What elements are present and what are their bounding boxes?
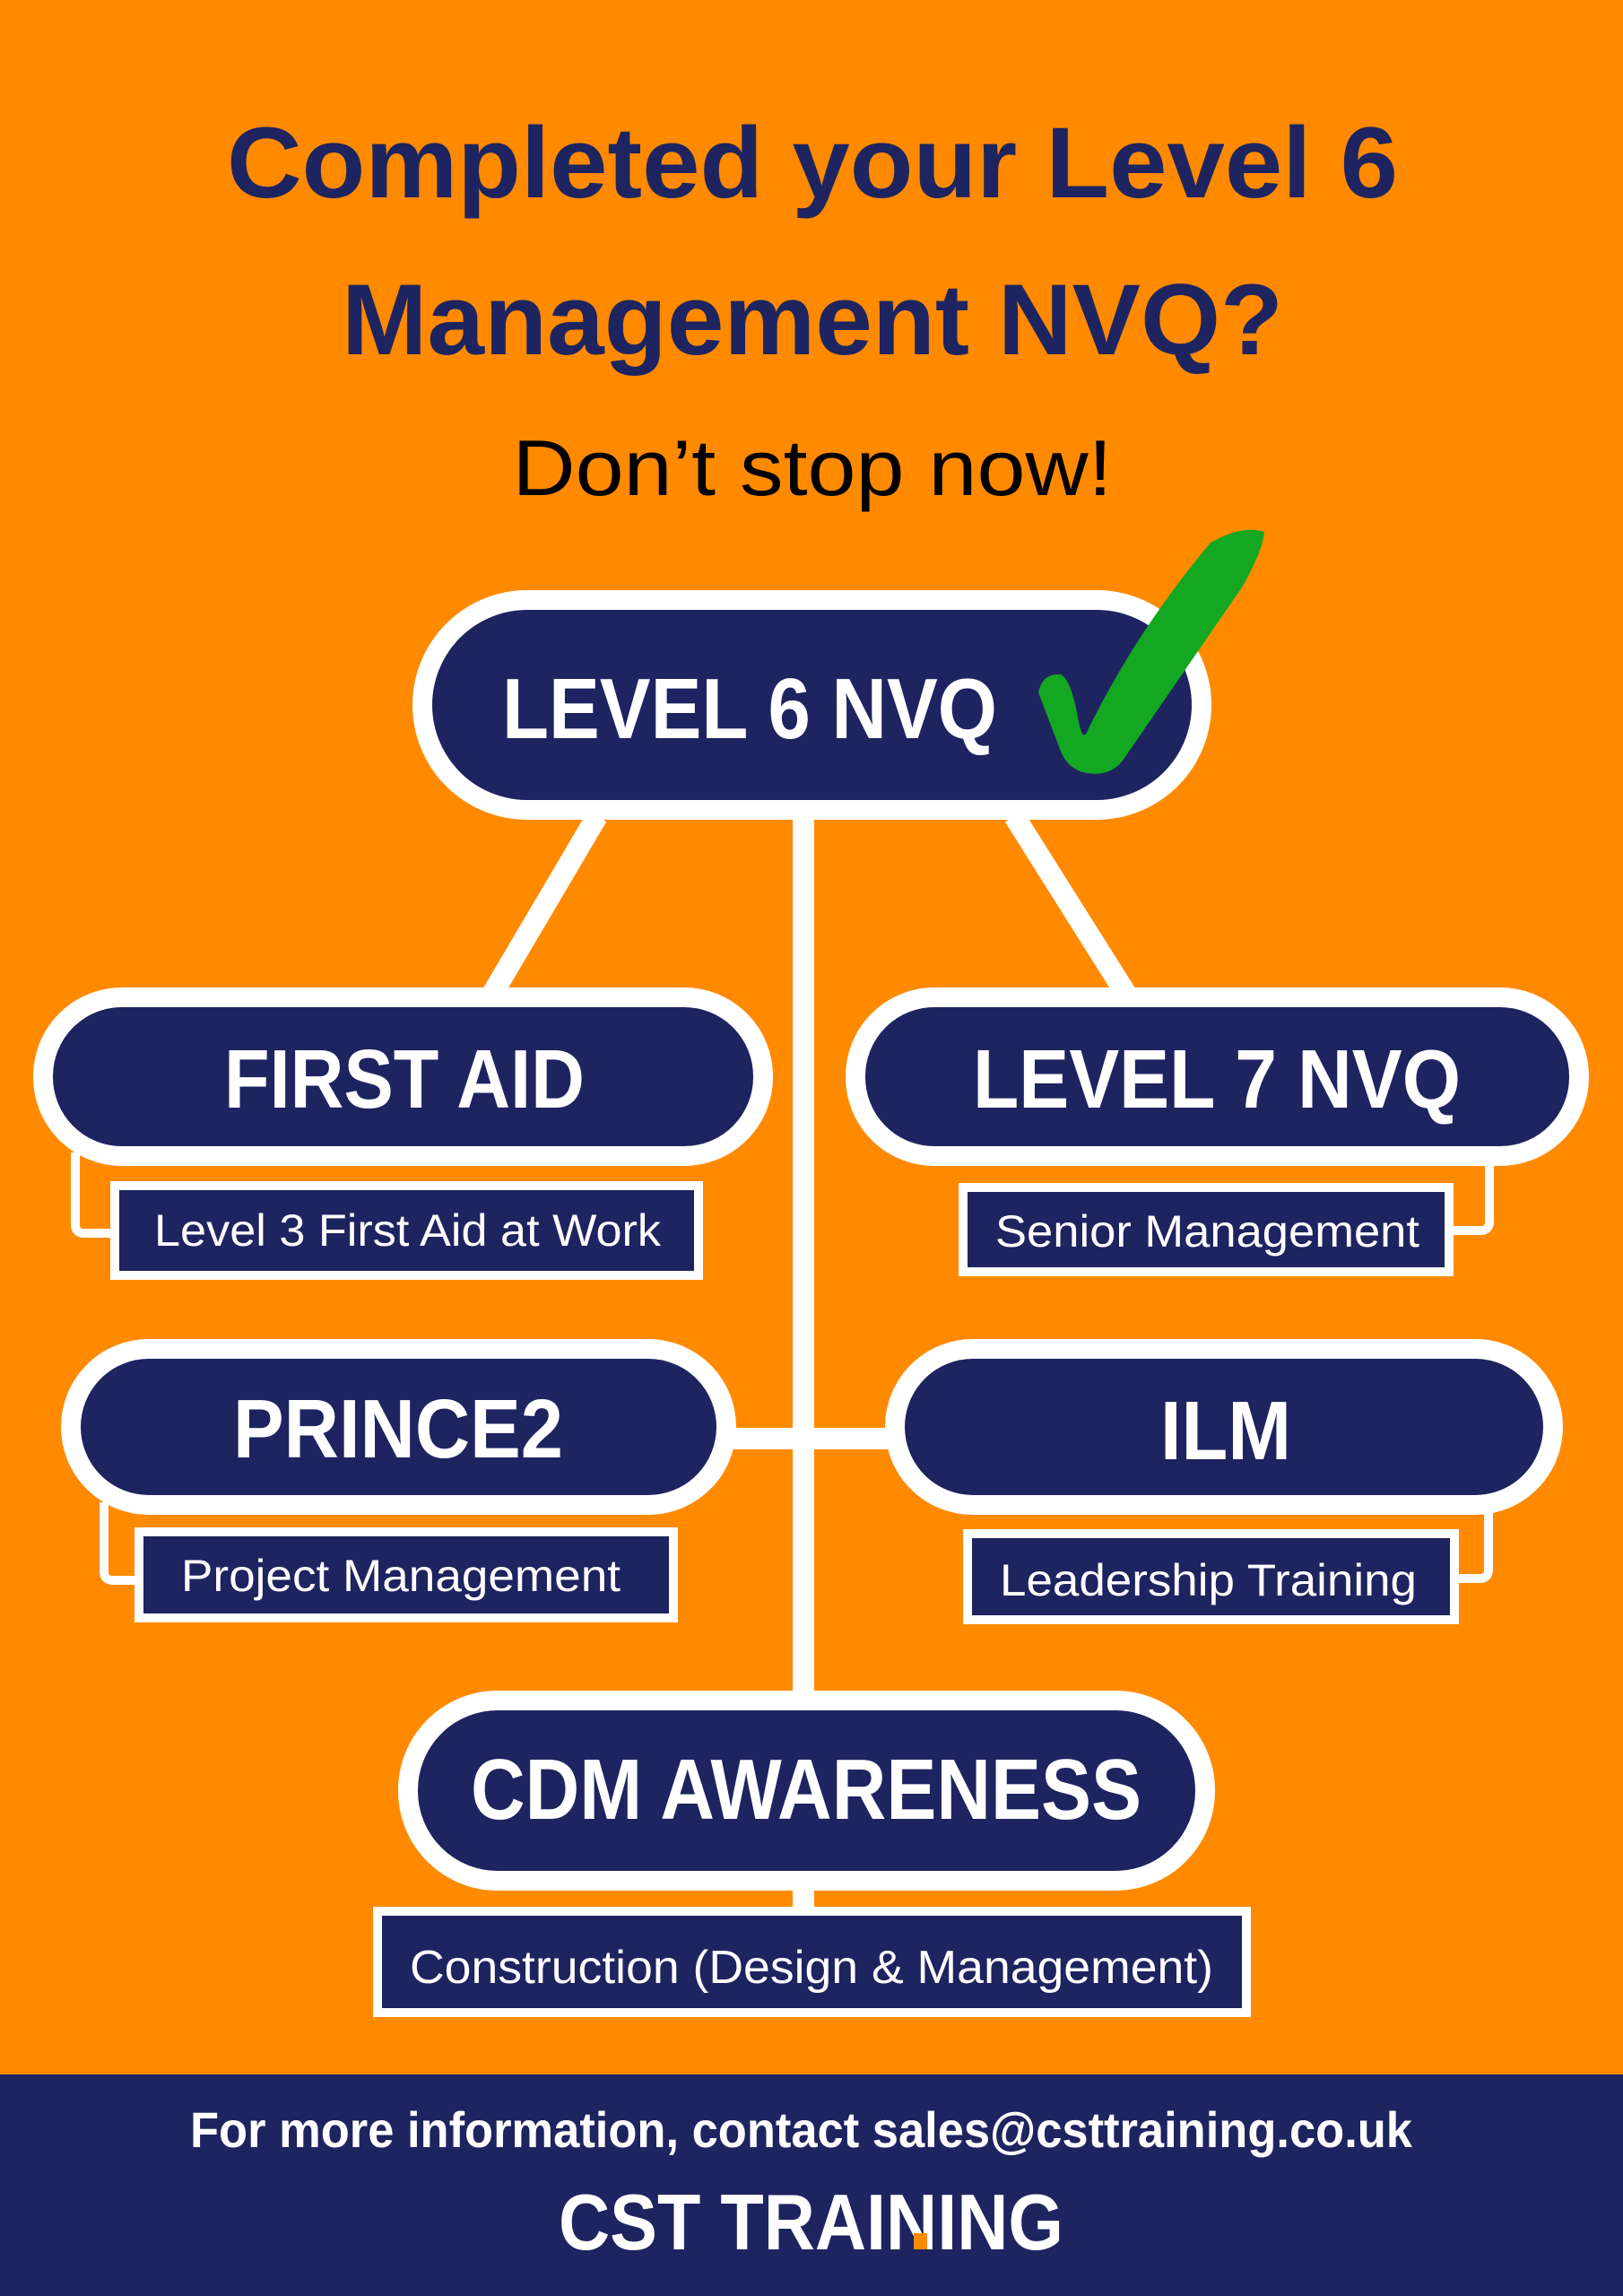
pill: cdm awareness	[408, 1700, 1205, 1881]
pill: ilm	[895, 1349, 1553, 1505]
logo: cst training: CST TRAINING	[559, 2178, 1063, 2266]
pill: prince2	[71, 1349, 726, 1505]
pill: level 7 nvq: LEVEL 7 NVQ	[973, 1032, 1461, 1126]
footer	[0, 2074, 1623, 2296]
title: Management NVQ?	[342, 264, 1283, 376]
box: leadership training	[968, 1534, 1454, 1620]
pill: first aid	[43, 997, 763, 1156]
box: construction design management: Construction (Design & Management)	[410, 1942, 1213, 1994]
sub connectors	[75, 1152, 1489, 1580]
title	[227, 107, 1398, 376]
pill: level 7 nvq	[855, 997, 1579, 1156]
box: leadership training: Leadership Training	[1000, 1555, 1417, 1605]
box: senior management: Senior Management	[995, 1206, 1419, 1257]
box: level 3 first aid at work	[115, 1186, 699, 1275]
pill: level 6 nvq	[422, 600, 1202, 810]
title: Completed your Level 6	[227, 107, 1398, 219]
box: senior management	[963, 1187, 1449, 1272]
pill: first aid: FIRST AID	[224, 1032, 585, 1126]
pill: level 6 nvq: LEVEL 6 NVQ	[502, 661, 997, 757]
footer contact text: For more information, contact sales@csttraining.co.uk	[190, 2101, 1413, 2158]
subtitle: Don’t stop now!	[513, 423, 1112, 512]
box: project management	[139, 1532, 673, 1618]
box: project management: Project Management	[181, 1551, 621, 1601]
box: level 3 first aid at work: Level 3 First Aid at Work	[154, 1205, 662, 1256]
connector lines	[491, 807, 1127, 1910]
icon: green checkmark	[1038, 530, 1264, 774]
box: construction design management	[378, 1911, 1246, 2013]
pill: cdm awareness: CDM AWARENESS	[471, 1742, 1141, 1838]
pill: prince2: PRINCE2	[233, 1382, 563, 1475]
pill: ilm: ILM	[1160, 1384, 1291, 1477]
